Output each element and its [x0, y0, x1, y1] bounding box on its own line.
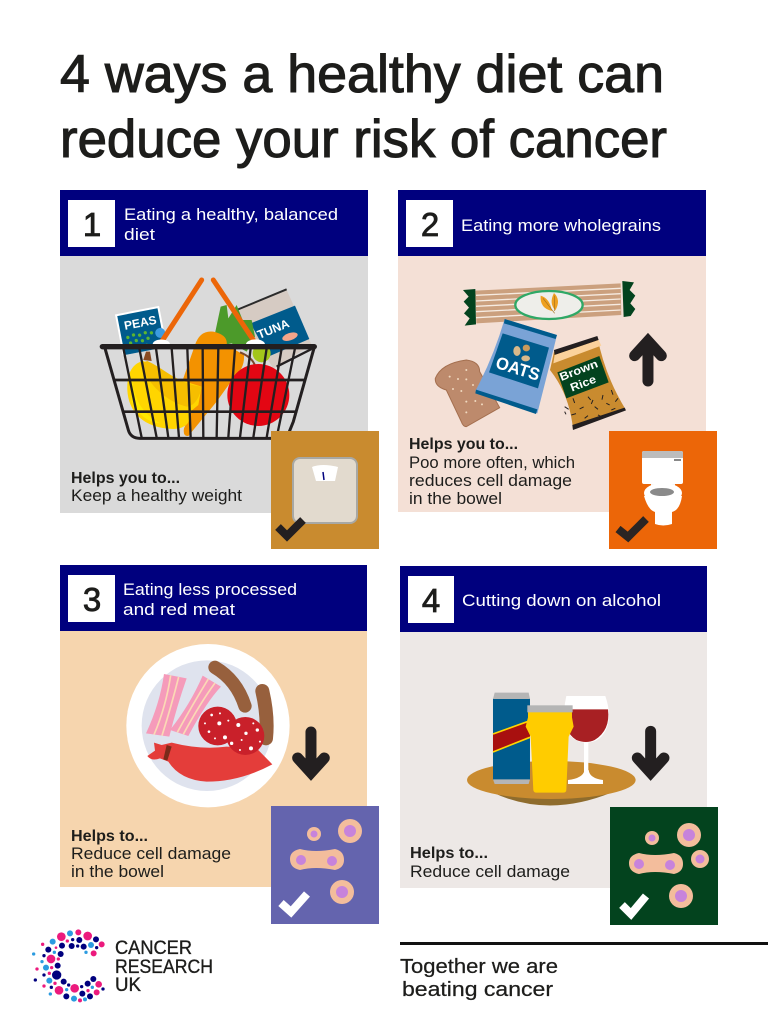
panel 2 header: 2: [421, 206, 439, 243]
helps you to text 2: in the bowel: [409, 490, 502, 508]
salami: [198, 707, 264, 755]
panel 1 header: [60, 190, 368, 256]
tagline: [400, 942, 768, 1001]
panel 1 header: Eating a healthy, balanced: [124, 205, 338, 224]
panel 3 background: [60, 631, 367, 887]
panel 1 header: 1: [83, 206, 101, 243]
can: [493, 693, 530, 784]
title: 4 ways a healthy diet can: [60, 45, 664, 104]
wholegrain bar: [463, 281, 635, 326]
panel 4 header: 4: [422, 582, 440, 619]
helps you to text 1: [71, 470, 242, 505]
helps to text 3: in the bowel: [71, 863, 164, 881]
panel 3 header: [60, 565, 367, 631]
logo wordmark: RESEARCH: [115, 957, 213, 978]
title: reduce your risk of cancer: [60, 110, 667, 169]
panel 3: processed and red meat: [60, 565, 379, 924]
logo mark: [32, 929, 105, 1002]
helps you to text 1: Helps you to...: [71, 470, 180, 487]
illustration: shopping basket: PEAS: [123, 313, 158, 333]
panel 2 header: [398, 190, 706, 256]
helps you to text 1: Keep a healthy weight: [71, 487, 242, 505]
illustration: shopping basket: [102, 280, 314, 438]
sausages: [215, 667, 245, 706]
brown rice packet: Brown: [558, 358, 600, 384]
illustration: plate of meat: [126, 644, 324, 807]
helps you to text 2: Poo more often, which: [409, 454, 575, 472]
helps to text 4: Reduce cell damage: [410, 863, 570, 881]
helps to text 3: [71, 828, 231, 881]
oats packet: [475, 319, 557, 414]
helps you to text 2: [409, 436, 575, 508]
panel 4: alcohol: [400, 566, 718, 925]
gammon: [147, 743, 272, 782]
brown rice packet: [550, 336, 626, 430]
icon: weighing scales: [271, 431, 379, 549]
tagline: Together we are: [400, 956, 558, 978]
pint glass: [526, 705, 574, 793]
logo wordmark: [115, 938, 213, 996]
icon: cells on purple: [271, 806, 379, 924]
panel 1 background: [60, 256, 368, 513]
panel 2: wholegrains: [398, 190, 717, 549]
helps to text 3: Reduce cell damage: [71, 845, 231, 863]
arrow: down: [298, 732, 324, 773]
panel 1: balanced diet: [60, 190, 379, 549]
panel 4 header: [400, 566, 707, 632]
helps to text 3: Helps to...: [71, 828, 148, 845]
panel 4 background: [400, 632, 707, 888]
arrow: up: [635, 341, 661, 381]
logo wordmark: UK: [115, 975, 141, 996]
panel 3 header: and red meat: [123, 600, 235, 619]
panel 3 header: Eating less processed: [123, 580, 297, 599]
panel 2 background: [398, 256, 706, 512]
logo: Cancer Research UK: [32, 929, 213, 1002]
logo wordmark: CANCER: [115, 938, 192, 959]
icon: toilet: [609, 431, 717, 549]
panel 3 header: 3: [83, 581, 101, 618]
illustration: wholegrain foods: [435, 281, 661, 430]
panel 1 header: diet: [124, 225, 155, 244]
title: [60, 45, 667, 169]
icon: cells on green: [610, 807, 718, 925]
helps to text 4: Helps to...: [410, 845, 488, 862]
tagline: beating cancer: [402, 979, 553, 1001]
helps you to text 2: reduces cell damage: [409, 472, 572, 490]
panel 2 header: Eating more wholegrains: [461, 216, 661, 235]
brown rice packet: Rice: [569, 374, 598, 394]
illustration: shopping basket: TUNA: [255, 316, 292, 342]
panel 4 header: Cutting down on alcohol: [462, 591, 661, 610]
helps you to text 2: Helps you to...: [409, 436, 518, 453]
illustration: drinks on a tray: [467, 693, 664, 805]
helps to text 4: [410, 845, 570, 881]
arrow: down: [637, 731, 664, 773]
oats packet: OATS: [493, 352, 542, 385]
bread slice: [435, 360, 500, 427]
bacon: [146, 674, 221, 737]
wine glass: [564, 696, 609, 784]
